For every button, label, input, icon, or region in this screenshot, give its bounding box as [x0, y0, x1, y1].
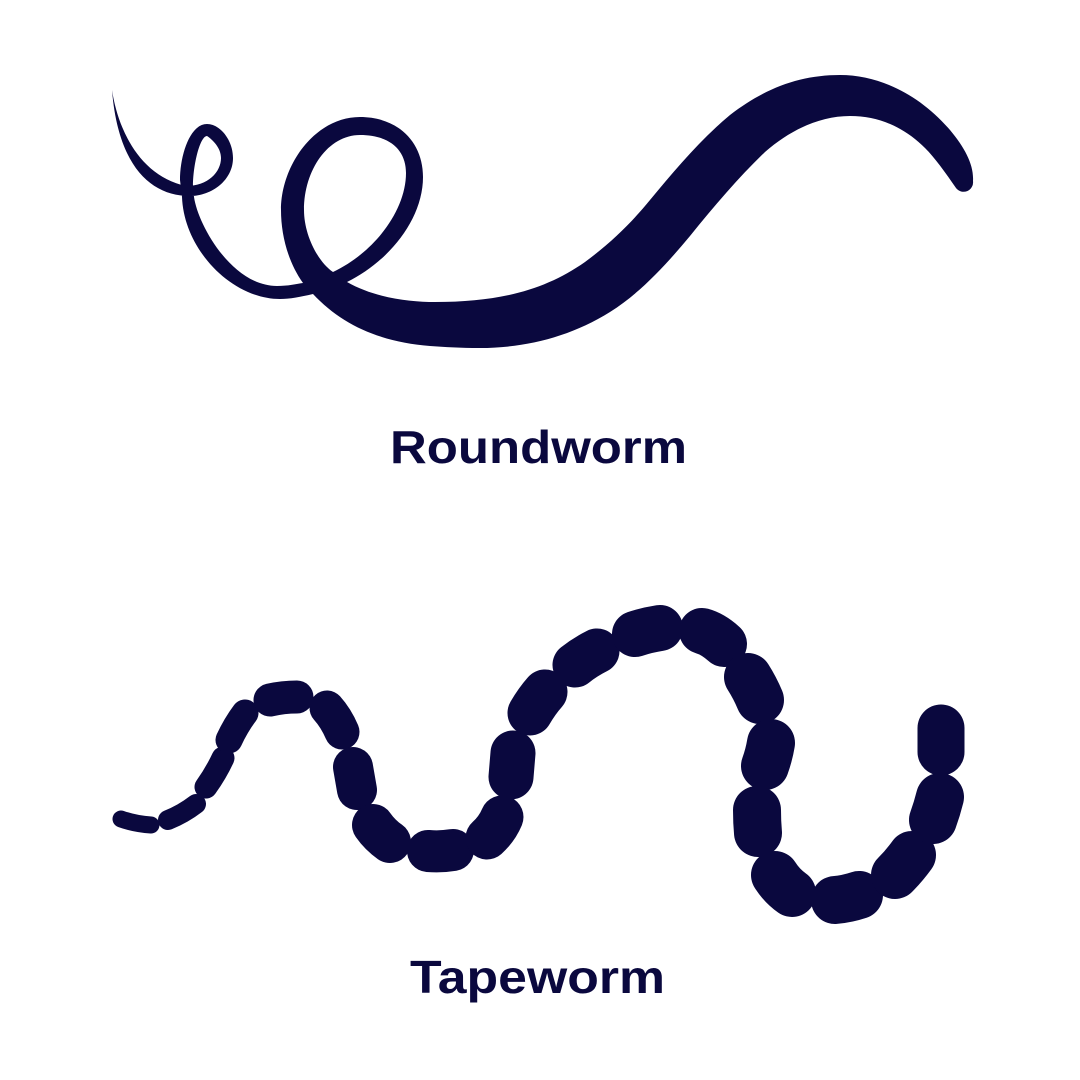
roundworm illustration — [112, 75, 973, 348]
tapeworm illustration — [121, 628, 941, 900]
label: Tapeworm: Tapeworm — [410, 951, 665, 1003]
label: Roundworm: Roundworm — [390, 421, 687, 473]
